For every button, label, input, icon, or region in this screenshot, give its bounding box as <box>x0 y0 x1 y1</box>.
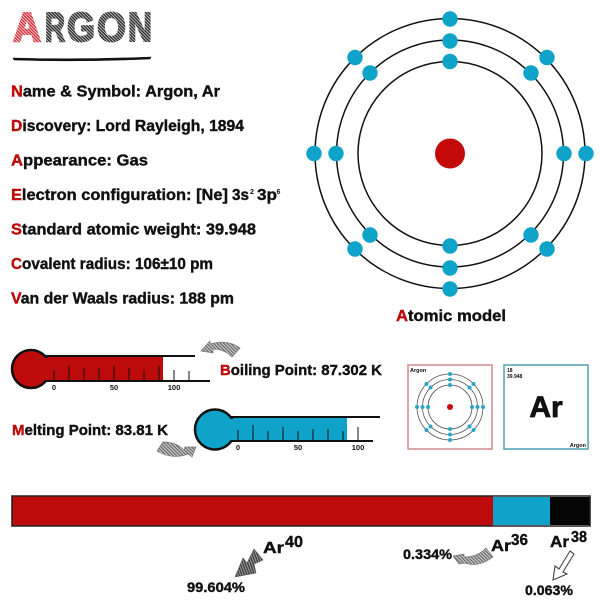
value: 0.063%: 0.063% <box>525 582 574 598</box>
thermometer: boiling point <box>12 350 210 392</box>
label: Ar38 <box>550 529 587 551</box>
text block: element facts: 3s <box>232 187 249 204</box>
electrons <box>306 11 594 297</box>
card: periodic table tile: Argon <box>570 443 587 449</box>
thermometer: boiling point: 100 <box>168 383 180 392</box>
card: periodic table tile: Ar <box>529 391 563 424</box>
thermometer: melting point <box>195 410 380 452</box>
thermometer: boiling point: 50 <box>110 383 118 392</box>
text block: element facts: Discovery: Lord Rayleigh, 1894 <box>11 118 244 135</box>
title: O <box>97 4 126 50</box>
atomic model label: Atomic model <box>396 308 506 325</box>
isotope bar <box>12 496 590 526</box>
atomic model <box>306 11 594 297</box>
text block: element facts: Van der Waals radius: 188 pm <box>11 290 234 308</box>
label: Ar36: 36 <box>511 532 528 549</box>
thermometer: melting point: 50 <box>294 443 302 452</box>
value: 0.334%: 0.334% <box>403 546 453 562</box>
arrow: Ar36 <box>453 548 493 565</box>
title: N <box>128 4 152 50</box>
card: mini atom <box>408 365 492 449</box>
label: Ar36 <box>491 532 528 555</box>
card: periodic table tile: 39.948 <box>507 374 523 380</box>
card: periodic table tile: 18 <box>507 368 513 374</box>
arrow: Ar38 <box>553 551 574 580</box>
text block: element facts: Electron configuration: [Ne] <box>11 187 228 204</box>
thermometer: melting point: 100 <box>352 443 364 452</box>
label: Ar40: Ar <box>263 540 284 557</box>
label: Ar40 <box>263 534 303 557</box>
arrow: boiling point <box>201 341 240 357</box>
value: 99.604%: 99.604% <box>187 579 246 595</box>
text block: element facts: 2 <box>250 189 254 196</box>
melting point label: Melting Point: 83.81 K <box>12 422 168 439</box>
label: Ar40: 40 <box>285 534 303 551</box>
label: Ar38: 38 <box>571 529 587 546</box>
thermometer: melting point: 0 <box>236 443 240 452</box>
text block: element facts: 3p <box>257 187 277 204</box>
title: A <box>13 4 41 50</box>
card: periodic table tile <box>504 365 588 449</box>
card: mini atom: Argon <box>410 368 427 374</box>
title <box>13 4 152 61</box>
text block: element facts: Appearance: Gas <box>11 152 148 170</box>
text block: element facts: Name & Symbol: Argon, Ar <box>11 84 220 100</box>
title: R <box>45 4 65 50</box>
text block: element facts: 6 <box>276 189 280 196</box>
text block: element facts: Covalent radius: 106±10 pm <box>11 256 213 273</box>
label: Ar36: Ar <box>491 538 511 555</box>
nucleus <box>435 138 465 168</box>
boiling point label: Boiling Point: 87.302 K <box>220 362 382 379</box>
text block: element facts <box>11 84 280 308</box>
text block: element facts: Standard atomic weight: 39.948 <box>11 222 256 238</box>
thermometer: boiling point: 0 <box>52 383 56 392</box>
label: Ar38: Ar <box>550 534 569 551</box>
arrow: Ar40 <box>235 549 263 577</box>
title: G <box>67 4 95 50</box>
arrow: melting point <box>157 442 196 457</box>
